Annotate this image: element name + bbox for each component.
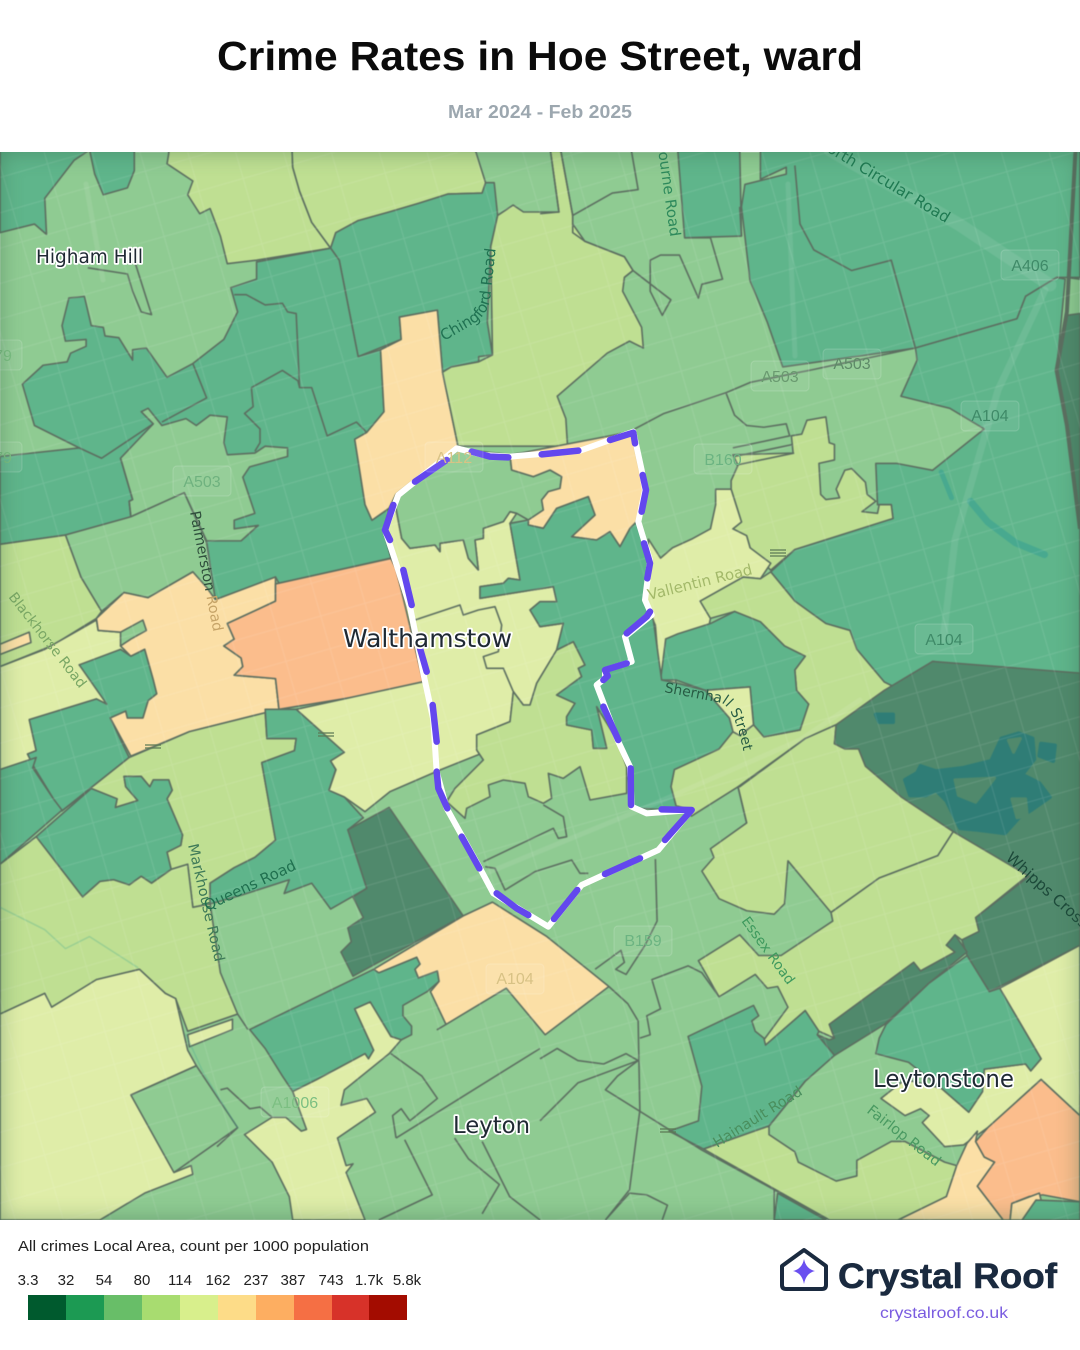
road number shields: A503	[183, 474, 221, 491]
areas: inside the ward	[296, 432, 733, 890]
place label: Leyton: Leyton	[453, 1113, 530, 1139]
road number shields: A1006	[272, 1095, 318, 1112]
road number shields	[0, 250, 1059, 1117]
road names: Hainault Road	[711, 1084, 805, 1151]
road names: Queens Road	[201, 856, 299, 915]
place label: Leytonstone: Leytonstone	[873, 1065, 1014, 1093]
logo: Crystal Roof	[780, 1248, 1058, 1322]
ward boundary: Hoe Street	[385, 432, 692, 927]
areas: south-east quadrant	[540, 661, 1080, 1220]
areas: north-east quadrant	[540, 150, 1080, 816]
road number shields: B160	[704, 452, 742, 469]
base map areas	[0, 150, 1080, 1220]
legend title: All crimes Local Area, count per 1000 population	[18, 1238, 369, 1255]
legend scale labels: 5.8k	[393, 1272, 422, 1289]
road number shields: A503	[761, 369, 799, 386]
road names: Vallentin Road	[646, 560, 754, 604]
place label: Walthamstow: Walthamstow	[343, 624, 512, 653]
legend scale labels: 114	[168, 1272, 192, 1289]
legend	[18, 1238, 422, 1320]
subtitle: date range: Mar 2024 - Feb 2025	[448, 102, 632, 122]
road names: Fairlop Road	[864, 1103, 944, 1170]
road names: Palmerston Road	[186, 510, 225, 633]
legend scale labels: 54	[96, 1272, 112, 1289]
road number shields: A104	[971, 408, 1009, 425]
areas: north-west quadrant	[0, 150, 643, 799]
road number shields: A112	[436, 450, 472, 467]
road names: Chingford Road	[441, 248, 496, 339]
legend colour bar	[28, 1295, 407, 1320]
legend scale labels: 162	[205, 1272, 231, 1289]
road names: Blackhorse Road	[5, 590, 89, 691]
legend scale labels: 1.7k	[355, 1272, 384, 1289]
icon: house with star	[782, 1250, 826, 1289]
road number shields: A104	[496, 971, 534, 988]
areas: south-west quadrant	[0, 649, 609, 1220]
legend scale labels: 32	[58, 1272, 74, 1289]
website: crystalroof.co.uk	[880, 1305, 1009, 1322]
wordmark: Crystal Roof	[838, 1257, 1057, 1296]
road number shields: A503	[833, 356, 871, 373]
street grid texture	[0, 152, 1080, 1220]
road names: Shernhall Street	[665, 682, 752, 751]
legend scale labels: 387	[280, 1272, 306, 1289]
panel: choropleth map	[0, 152, 1080, 1220]
legend scale labels: 237	[243, 1272, 269, 1289]
ponds	[876, 714, 1055, 833]
legend scale labels: 3.3	[18, 1272, 38, 1289]
legend scale labels: 743	[318, 1272, 344, 1289]
road number shields: A406	[1011, 258, 1049, 275]
road names: Markhouse Road	[184, 842, 227, 963]
title: Crime Rates in Hoe Street, ward	[217, 33, 863, 79]
road names	[5, 152, 1080, 1170]
map edge vignette	[0, 152, 1080, 1220]
place label: Higham Hill: Higham Hill	[36, 247, 143, 268]
road names: Essex Road	[738, 914, 798, 988]
main roads	[86, 150, 1050, 880]
rail station icons	[145, 550, 786, 1132]
road number shields: B159	[624, 933, 662, 950]
legend scale labels: 80	[134, 1272, 150, 1289]
road number shields: A104	[925, 632, 963, 649]
legend scale labels	[18, 1272, 422, 1289]
